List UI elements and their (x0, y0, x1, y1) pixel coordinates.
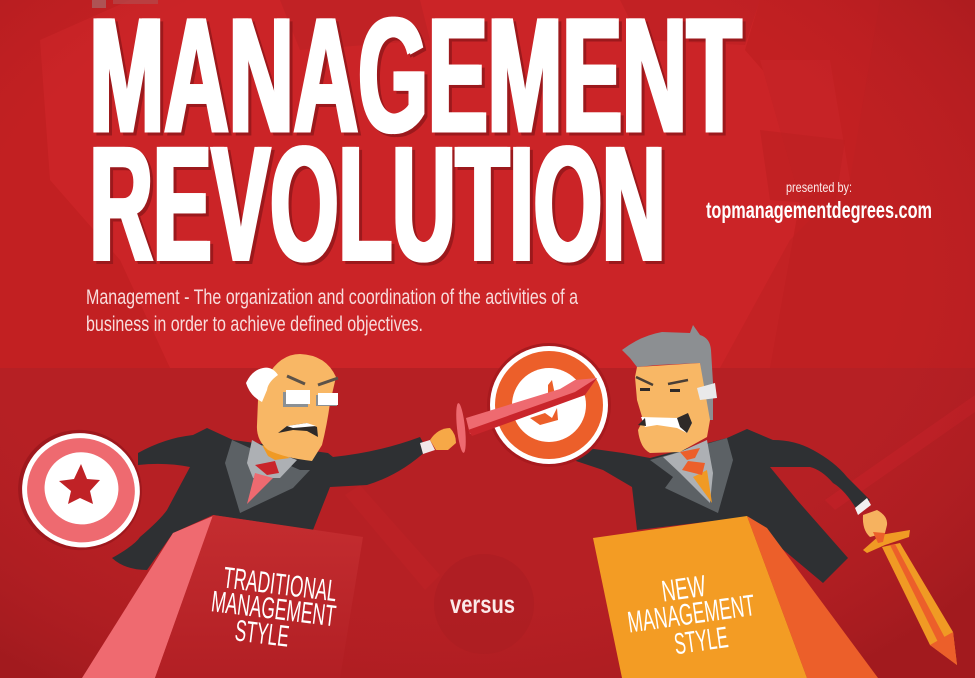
left tie (247, 461, 279, 504)
left shirt (247, 440, 297, 478)
left mouth (278, 423, 318, 437)
right ear band (697, 383, 717, 400)
right tie (682, 461, 712, 503)
definition text (86, 286, 578, 336)
title line: revolution (88, 112, 670, 298)
logo fragment at top (92, 0, 158, 8)
right hand (863, 510, 887, 537)
left brows (287, 376, 338, 385)
right brows (636, 377, 688, 385)
left jacket (112, 428, 427, 570)
left cuff (420, 440, 435, 454)
right lapel (650, 438, 733, 513)
left head (257, 354, 336, 461)
right shield (487, 343, 611, 467)
right sword (863, 530, 957, 665)
presented by: presented by: (786, 179, 852, 195)
definition text: business in order to achieve defined objectives. (86, 313, 423, 336)
right eyes (640, 388, 680, 392)
podium label (206, 561, 341, 659)
podium: traditional (82, 515, 363, 678)
left manager (5, 354, 468, 570)
definition text: Management - The organization and coordination of the activities of a (86, 286, 578, 309)
left neck (262, 445, 290, 460)
right cuff (855, 498, 871, 515)
podium label: STYLE (672, 621, 730, 661)
podium label: MANAGEMENT (626, 589, 757, 640)
podium label (622, 563, 761, 667)
right head (635, 363, 710, 453)
podium front (155, 515, 363, 678)
podium: new (593, 516, 878, 678)
left fist (430, 428, 456, 450)
right jacket (573, 429, 870, 583)
shield barbs (530, 380, 558, 425)
left hair (246, 368, 278, 402)
left lapel (225, 440, 310, 513)
right neck (680, 448, 700, 460)
podium label: STYLE (233, 614, 291, 654)
podium label: TRADITIONAL (222, 562, 339, 608)
podium side (82, 516, 213, 678)
left glasses (283, 390, 338, 407)
versus label: versus (450, 591, 515, 619)
podium label: MANAGEMENT (210, 585, 338, 633)
star (59, 464, 100, 504)
right shirt (663, 440, 713, 503)
right shield with left sword (466, 343, 611, 467)
left shield (5, 416, 155, 564)
right hair (622, 325, 713, 420)
podium front (593, 516, 807, 678)
podium label: NEW (660, 570, 708, 609)
right mouth (638, 413, 692, 433)
left sword blade (466, 378, 597, 436)
podium side (747, 516, 878, 678)
right manager (573, 325, 957, 665)
title (88, 0, 746, 298)
left sword guard (454, 403, 468, 453)
